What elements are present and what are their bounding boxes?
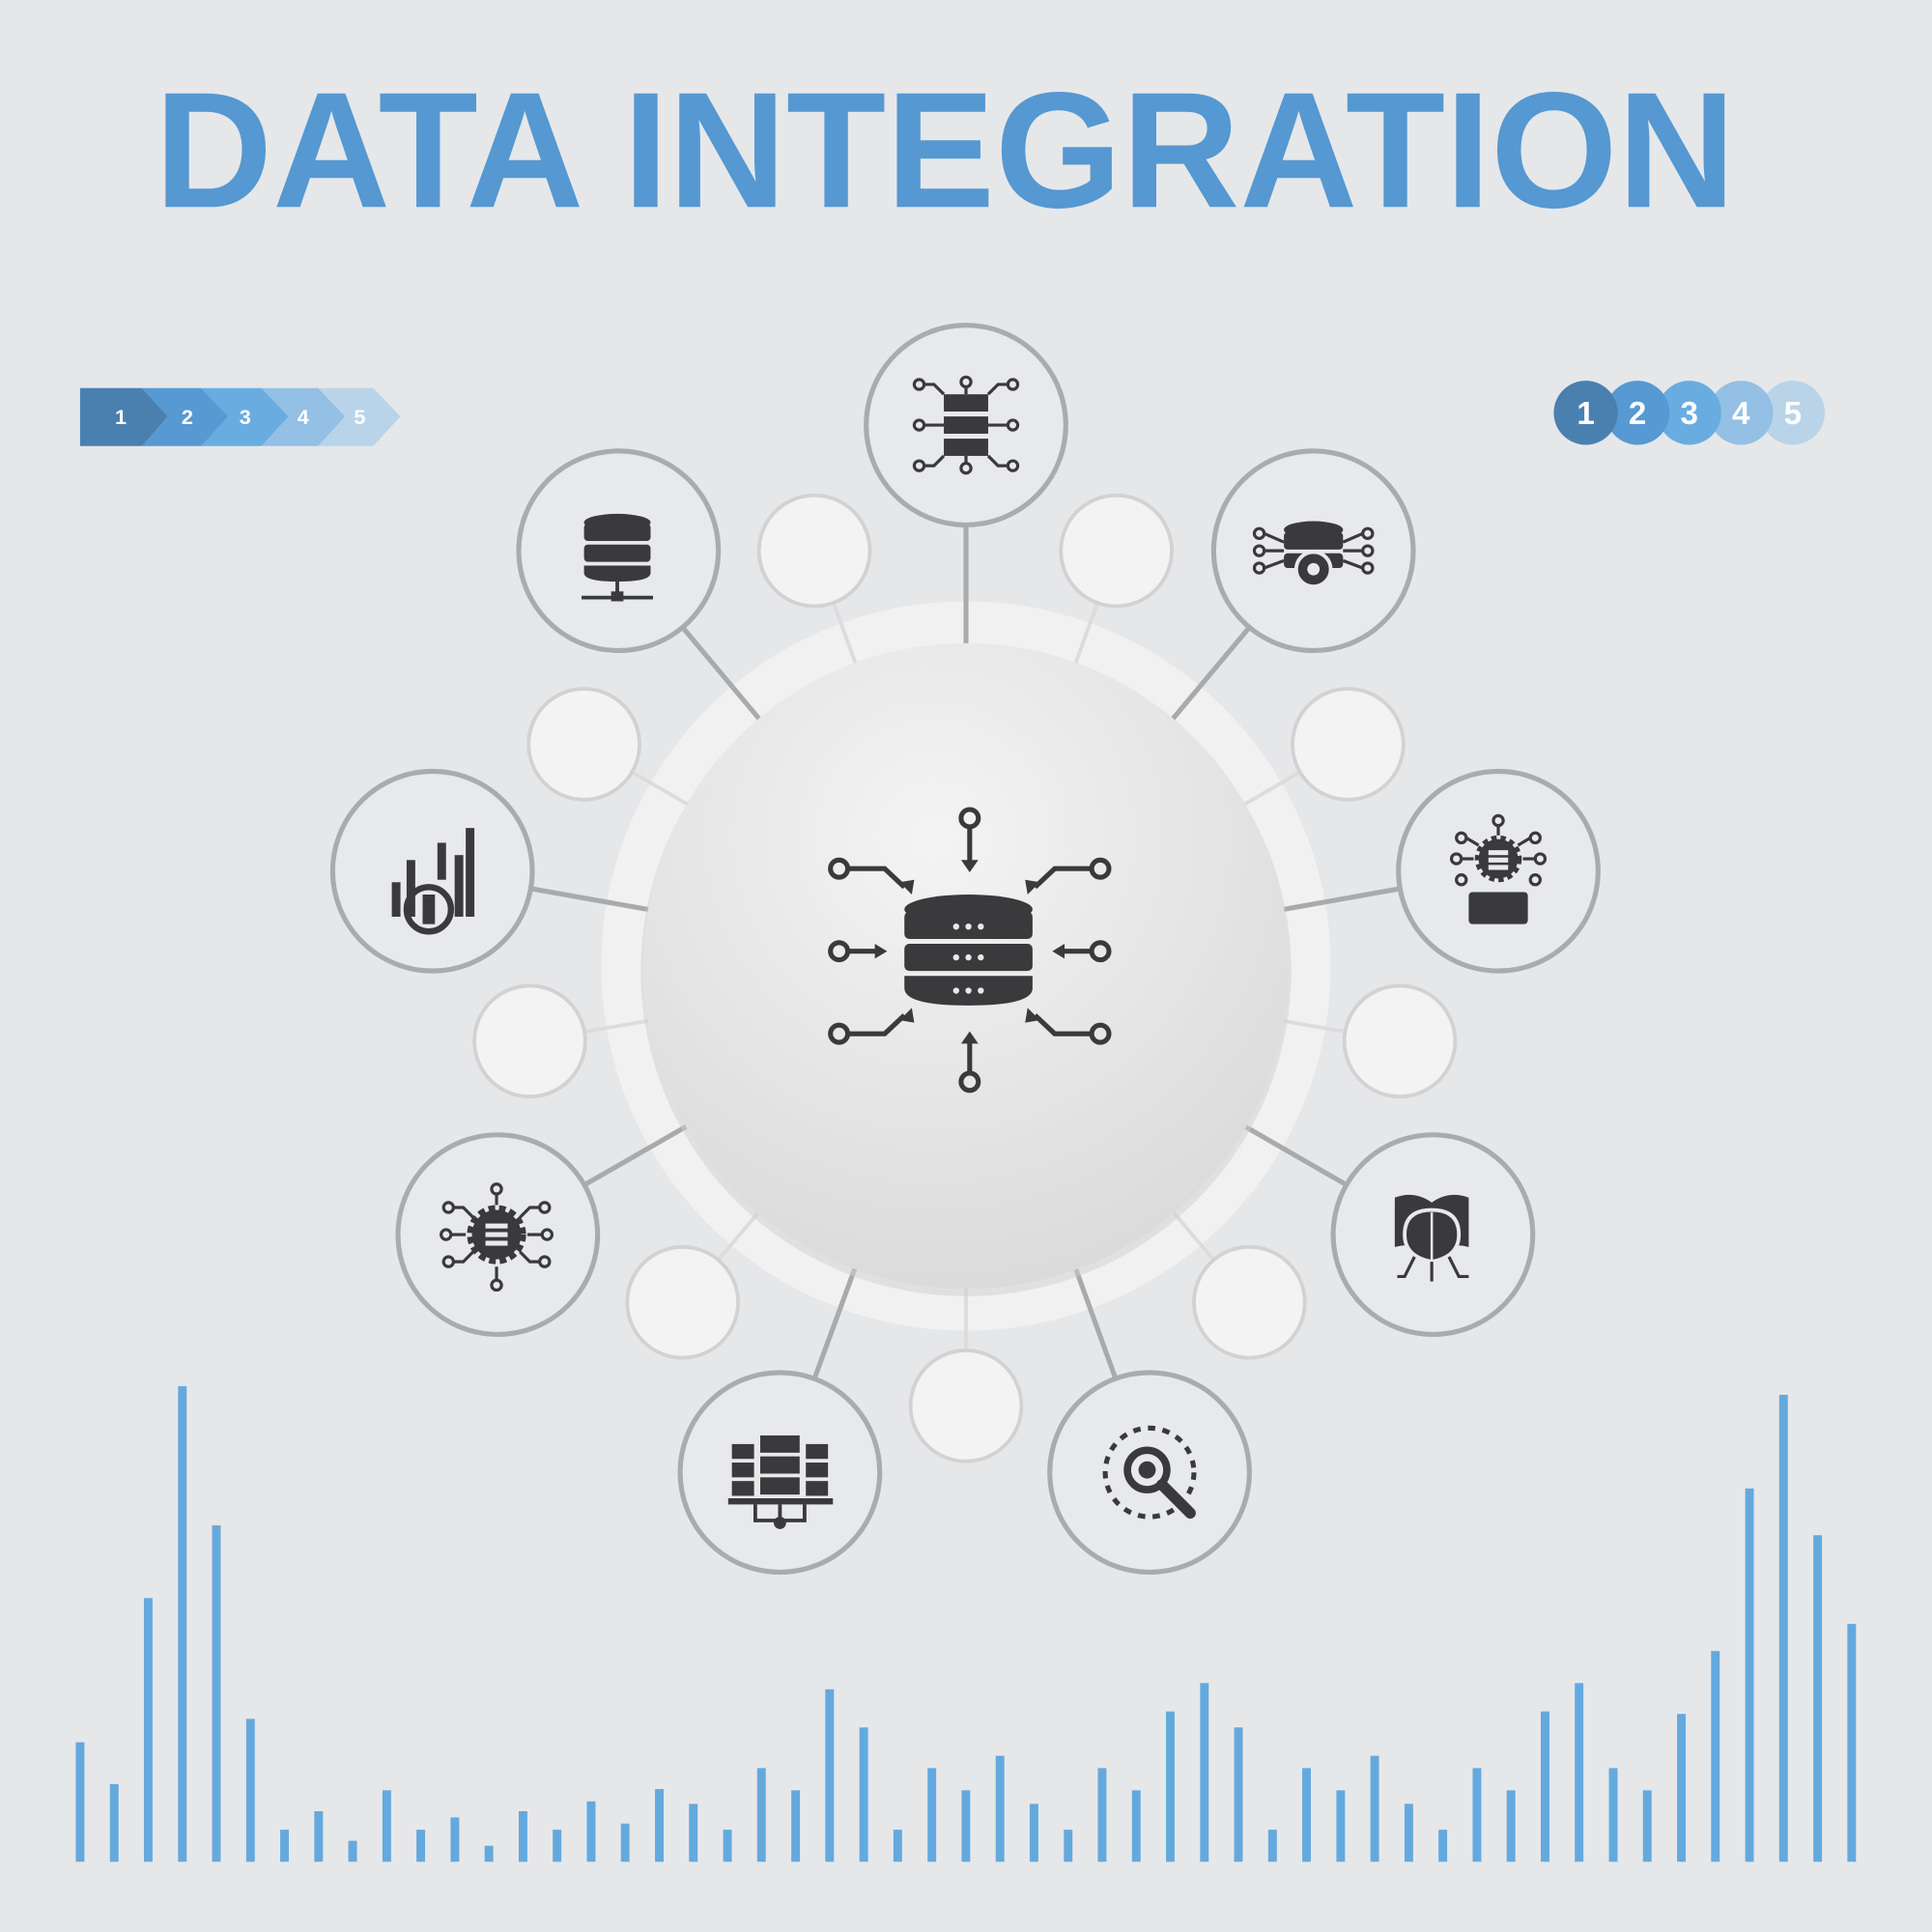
- step circles 1-5: 4: [1732, 396, 1750, 432]
- icon circle: search: [1050, 1373, 1249, 1573]
- icon circle: server racks: [680, 1373, 880, 1573]
- title: DATA INTEGRATION: [155, 58, 1736, 242]
- step chevrons 1-5: [80, 388, 401, 446]
- step chevrons 1-5: 2: [182, 405, 193, 429]
- step circles 1-5: [1553, 381, 1825, 444]
- step chevrons 1-5: 1: [115, 405, 127, 429]
- icon: central database with arrows: [831, 810, 1109, 1091]
- step circles 1-5: 5: [1784, 396, 1802, 432]
- step chevrons 1-5: 5: [354, 405, 365, 429]
- icon circle: database network: [519, 451, 719, 650]
- step chevrons 1-5: 4: [298, 405, 309, 429]
- icon circle: bar chart magnifier: [332, 771, 532, 971]
- bar chart: [75, 1386, 1856, 1861]
- icon circle: book brain: [1333, 1135, 1533, 1334]
- step circles 1-5: 3: [1680, 396, 1698, 432]
- icon circle: gear person: [1399, 771, 1598, 971]
- small empty circles: [474, 496, 1455, 1462]
- step chevrons 1-5: 3: [240, 405, 251, 429]
- step circles 1-5: 2: [1629, 396, 1646, 432]
- connectors: [433, 425, 1498, 1472]
- central circle: [640, 643, 1292, 1296]
- icon circle: database gear circuit: [1213, 451, 1413, 650]
- icon circle: top server circuit: [867, 326, 1065, 525]
- icon circle: gear circuit: [398, 1135, 598, 1334]
- step circles 1-5: 1: [1577, 396, 1595, 432]
- outer ring: [601, 601, 1331, 1331]
